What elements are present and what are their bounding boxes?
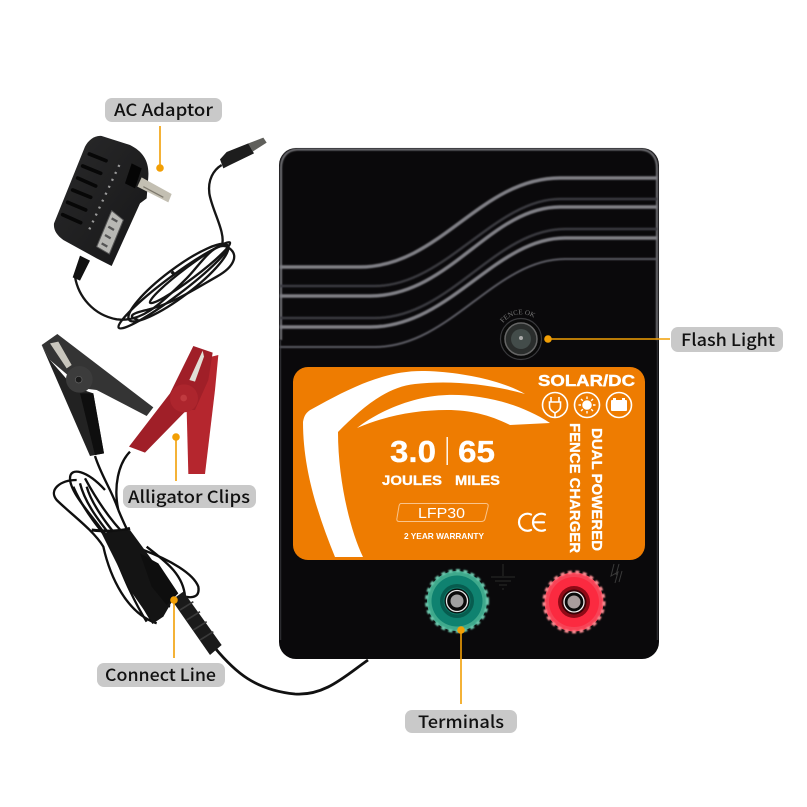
callout: Connect Line <box>97 596 225 687</box>
vertical title: dual powered: DUAL POWERED <box>588 428 604 551</box>
icon: battery <box>606 392 632 418</box>
model badge LFP30: LFP30 <box>418 506 465 522</box>
spec: joules and miles: 3.0 <box>390 434 436 469</box>
flash light indicator <box>500 310 542 360</box>
connect line cable to charger <box>215 648 368 694</box>
callout: Flash Light: Flash Light <box>681 326 775 351</box>
callout: Connect Line: Connect Line <box>105 661 216 686</box>
spec: joules and miles <box>382 434 500 488</box>
spec: joules and miles: MILES <box>455 472 500 488</box>
CE mark <box>519 514 545 531</box>
adaptor body <box>54 136 148 266</box>
callout: Alligator Clips: Alligator Clips <box>128 483 250 508</box>
panel: fence charger device <box>278 148 659 659</box>
icon: plug <box>542 392 568 418</box>
green terminal <box>426 570 488 632</box>
flash light indicator: FENCE OK <box>500 310 536 323</box>
callout: Alligator Clips <box>123 433 256 508</box>
plug prongs <box>137 177 172 202</box>
callout: Terminals: Terminals <box>418 708 504 733</box>
warranty text: 2 YEAR WARRANTY <box>404 531 484 541</box>
coiled cable bundle <box>54 452 199 623</box>
orange label panel <box>293 367 645 560</box>
dense cable mass <box>102 530 177 623</box>
spec: joules and miles: JOULES <box>382 472 442 488</box>
callout: Flash Light <box>544 326 783 352</box>
callout: Terminals <box>405 626 517 733</box>
callout: AC Adaptor: AC Adaptor <box>114 96 213 121</box>
red clip <box>129 346 218 474</box>
heading SOLAR/DC: SOLAR/DC <box>538 373 636 390</box>
icon: ground symbol <box>491 564 515 589</box>
housing edge highlights <box>281 150 657 340</box>
spec: joules and miles: 65 <box>458 434 495 469</box>
connector barrel <box>140 553 178 605</box>
callout: AC Adaptor <box>105 96 222 172</box>
red terminal <box>544 572 604 632</box>
icon: sun <box>574 392 600 418</box>
strain relief <box>73 256 90 281</box>
black clip <box>42 334 153 456</box>
housing wave ridges <box>280 178 657 347</box>
model badge LFP30 <box>397 504 488 522</box>
white swoosh graphic <box>303 371 550 557</box>
adaptor cable <box>75 165 236 335</box>
alligator clips and coiled cable photo <box>42 334 222 655</box>
device housing <box>279 148 659 659</box>
icon: lightning symbol <box>611 564 622 583</box>
AC adaptor product photo <box>54 136 267 335</box>
DC barrel plug <box>220 143 254 168</box>
rating sticker <box>97 211 123 254</box>
vertical title: fence charger: FENCE CHARGER <box>566 423 582 554</box>
